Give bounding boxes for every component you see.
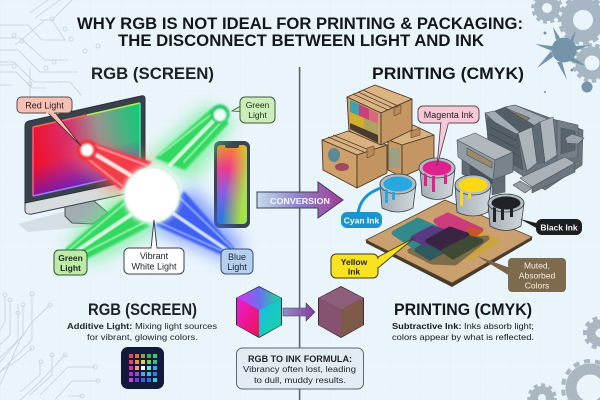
arrow: cube to cube	[283, 303, 315, 321]
label: green light top	[232, 97, 275, 123]
icon: vibrant RGB cube	[236, 286, 282, 338]
light beams and white orb	[65, 104, 244, 264]
illustration: printed board with overlapping inks	[366, 200, 532, 287]
label: muted absorbed colors	[477, 256, 566, 292]
label: blue light: Blue	[228, 252, 246, 262]
label: vibrant white light	[124, 220, 184, 274]
label: vibrant white light: White Light	[131, 262, 177, 272]
circuit decoration: bottom left	[0, 292, 100, 400]
ink: orange overlap	[468, 228, 481, 240]
callout: RGB to ink formula: to dull, muddy results.	[254, 375, 346, 385]
illustration: cardboard boxes	[322, 85, 434, 188]
heading: RGB (Screen): RGB (SCREEN)	[91, 64, 214, 83]
bucket: cyan	[380, 174, 416, 212]
title	[77, 15, 523, 50]
ink: purple overlap	[413, 228, 446, 244]
icon: glowing pixel grid app	[121, 347, 164, 389]
label: vibrant white light: Vibrant	[140, 251, 169, 261]
bucket: magenta	[419, 158, 455, 200]
text block: printing description	[392, 300, 534, 342]
label: green light bottom	[54, 250, 87, 275]
ink: yellow	[440, 226, 498, 258]
title: WHY RGB IS NOT IDEAL FOR PRINTING & PACKAGING:	[77, 15, 523, 33]
text block: printing description: Subtractive Ink: Inks absorb light;	[392, 321, 534, 331]
label: blue light	[221, 249, 253, 274]
text block: printing description: PRINTING (CMYK)	[394, 300, 532, 319]
ink: green dark overlap	[444, 238, 481, 257]
label: yellow ink: Yellow	[341, 257, 368, 267]
ink: blue dark overlap	[417, 243, 443, 258]
icon: gears and ink splat, top right	[533, 0, 600, 93]
illustration: ink buckets	[380, 158, 524, 230]
callout: RGB to ink formula	[236, 348, 364, 389]
icon: gears, bottom right	[529, 318, 600, 400]
text block: RGB description: for vibrant, glowing colors.	[87, 332, 198, 342]
text block: RGB description: Additive Light: Mixing light sources	[67, 321, 217, 331]
bucket: yellow	[455, 175, 491, 216]
box: top	[347, 85, 412, 145]
label: muted absorbed colors: Muted,	[524, 260, 550, 270]
text block: printing description: colors appear by what is reflected.	[392, 332, 534, 342]
label: red light	[17, 97, 81, 146]
label: black ink: Black Ink	[540, 222, 578, 232]
centre divider	[299, 67, 300, 400]
box: right	[388, 125, 434, 177]
box: left	[322, 131, 387, 188]
label: green light top: Light	[248, 110, 267, 120]
callout: RGB to ink formula: RGB TO INK FORMULA:	[248, 354, 352, 364]
label: green light bottom: Green	[58, 253, 83, 263]
ink: dark centre	[428, 229, 467, 249]
heading: Printing (CMYK): PRINTING (CMYK)	[372, 64, 524, 83]
label: red light: Red Light	[25, 100, 64, 110]
label: muted absorbed colors: Colors	[525, 280, 549, 290]
label: magenta ink	[418, 106, 479, 166]
bucket: black	[488, 194, 524, 230]
label: magenta ink: Magenta Ink	[424, 110, 474, 120]
ink: black shadow	[410, 238, 487, 263]
label: muted absorbed colors: Absorbed	[519, 270, 555, 280]
label: blue light: Light	[227, 262, 247, 272]
arrow: conversion	[257, 182, 343, 218]
callout: RGB to ink formula: Vibrancy often lost, leading	[243, 364, 356, 374]
label: green light top: Green	[246, 100, 270, 110]
text block: RGB description	[67, 300, 217, 342]
title: THE DISCONNECT BETWEEN LIGHT AND INK	[118, 32, 484, 50]
label: yellow ink	[331, 238, 414, 278]
label: yellow ink: Ink	[348, 266, 360, 276]
icon: muted ink cube	[318, 286, 364, 338]
icon: smartphone	[214, 141, 250, 228]
ink: teal	[394, 220, 440, 247]
illustration: printing press	[457, 105, 584, 195]
label: black ink	[520, 219, 582, 235]
arrow: conversion: CONVERSION	[270, 196, 330, 206]
text block: RGB description: RGB (SCREEN)	[88, 300, 197, 319]
icon: computer monitor	[18, 96, 145, 232]
label: cyan ink	[341, 188, 382, 228]
label: cyan ink: Cyan Ink	[344, 216, 379, 226]
ink: magenta	[436, 215, 481, 243]
label: green light bottom: Light	[60, 263, 81, 273]
circuit decoration: top left	[0, 0, 100, 100]
